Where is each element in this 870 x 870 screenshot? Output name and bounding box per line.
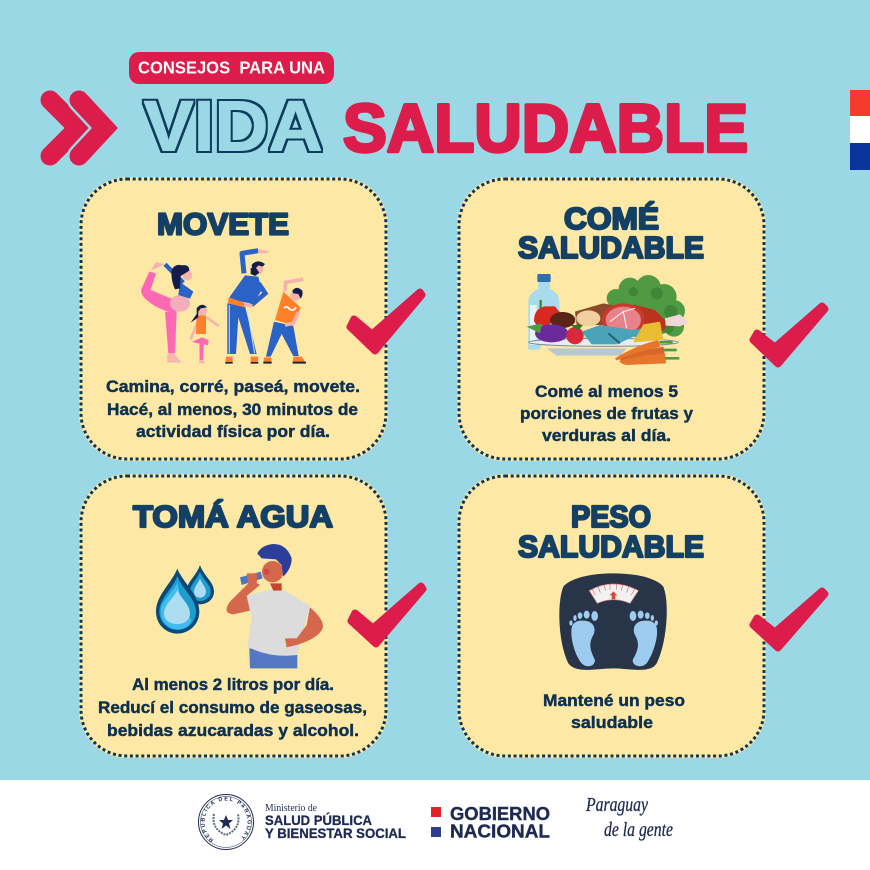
heading: movete: MOVETE	[157, 206, 289, 242]
footer	[0, 780, 870, 870]
logo: gobierno nacional	[431, 803, 550, 842]
text: movete advice: Camina, corré, paseá, movete.	[106, 378, 360, 396]
panel: tomá agua	[81, 476, 423, 756]
text: peso advice: Mantené un peso	[543, 692, 685, 710]
text: tomá agua advice	[98, 676, 367, 740]
text: tomá agua advice: bebidas azucaradas y alcohol.	[107, 722, 359, 740]
badge: consejos para una	[129, 52, 334, 84]
title: saludable: SALUDABLE	[343, 90, 748, 166]
illustration: bathroom scale	[559, 573, 667, 670]
header	[50, 52, 748, 166]
logo text: ministerio: Ministerio de	[265, 803, 317, 814]
text: peso advice: saludable	[571, 714, 653, 732]
logo text: ministerio: Y BIENESTAR SOCIAL	[265, 826, 406, 841]
text: comé advice: porciones de frutas y	[520, 405, 694, 423]
icon: check mark	[753, 306, 825, 364]
text: movete advice: Hacé, al menos, 30 minutos de	[107, 401, 358, 419]
heading: comé saludable: SALUDABLE	[518, 230, 704, 265]
logo: national seal: REPUBLICA DEL PARAGUAY	[200, 796, 252, 842]
text: movete advice	[106, 378, 360, 441]
logo: gobierno nacional: NACIONAL	[450, 820, 550, 842]
illustration: healthy food plate	[527, 274, 688, 365]
logo text: ministerio	[265, 803, 406, 841]
title: vida: VIDA	[144, 88, 323, 166]
illustration: water drops and man drinking	[156, 544, 323, 668]
heading: comé saludable	[518, 201, 704, 265]
icon: check mark	[753, 591, 825, 648]
text: movete advice: actividad física por día.	[136, 423, 330, 441]
illustration: family exercising	[141, 249, 306, 364]
icon: check mark	[350, 292, 422, 351]
logo text: ministerio: SALUD PÚBLICA	[265, 813, 372, 828]
logo: gobierno nacional: GOBIERNO	[450, 803, 550, 824]
panel: comé saludable	[459, 179, 825, 459]
icon: check mark	[351, 586, 423, 644]
text: peso advice	[543, 692, 685, 732]
panel: movete	[81, 179, 422, 459]
panel: peso saludable	[459, 476, 825, 756]
logo: paraguay de la gente: Paraguay	[585, 794, 648, 816]
heading: peso saludable	[518, 499, 704, 564]
text: comé advice: Comé al menos 5	[535, 383, 678, 401]
flag of Paraguay	[850, 90, 870, 170]
badge: consejos para una: CONSEJOS PARA UNA	[138, 58, 325, 78]
text: tomá agua advice: Al menos 2 litros por día.	[132, 676, 334, 694]
heading: peso saludable: PESO	[571, 499, 651, 534]
icon: double chevron	[50, 100, 105, 156]
text: comé advice	[520, 383, 694, 445]
text: tomá agua advice: Reducí el consumo de gaseosas,	[98, 699, 367, 717]
logo: paraguay de la gente: de la gente	[604, 819, 673, 841]
heading: peso saludable: SALUDABLE	[518, 529, 704, 564]
heading: tomá agua: TOMÁ AGUA	[133, 499, 333, 534]
text: comé advice: verduras al día.	[542, 427, 671, 445]
logo: paraguay de la gente	[585, 794, 673, 841]
heading: comé saludable: COMÉ	[564, 201, 659, 236]
